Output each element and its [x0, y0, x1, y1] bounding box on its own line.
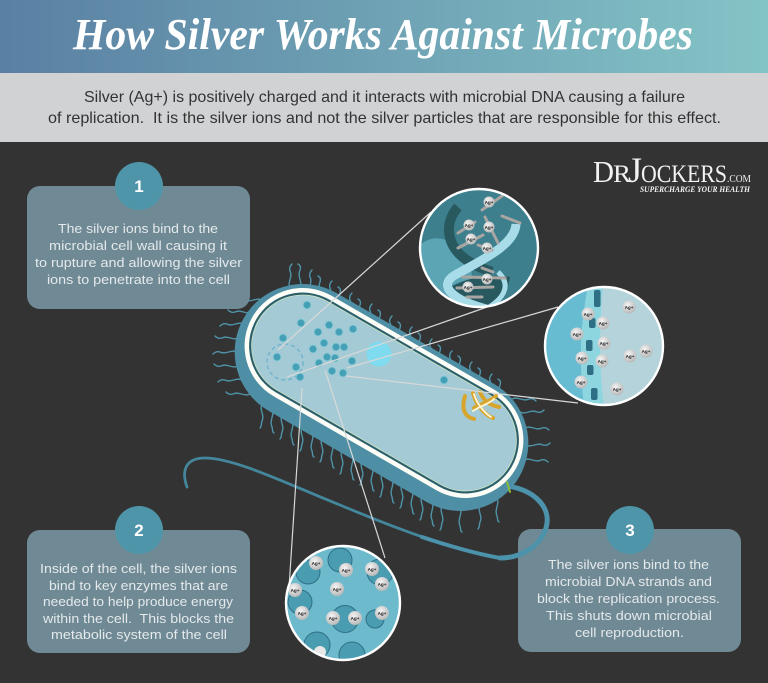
badge 1 [115, 162, 163, 210]
panel: step 1: microbial cell wall causing it [49, 238, 227, 253]
panel: step 3: cell reproduction. [575, 625, 684, 640]
logo: DrJockers.com: SUPERCHARGE YOUR HEALTH [640, 185, 751, 194]
panel: step 3: This shuts down microbial [546, 608, 712, 623]
pointer lines [278, 212, 578, 588]
zoom circle: enzymes: Ag+ [312, 561, 321, 566]
intro text band: of replication. It is the silver ions and not the silver particles that are responsible for this effect. [48, 110, 721, 127]
zoom circle: cell wall rupture: Ag+ [625, 305, 634, 310]
panel: step 3: The silver ions bind to the [548, 557, 709, 572]
header banner [0, 0, 768, 73]
zoom circle: cell wall rupture: Ag+ [598, 359, 607, 364]
zoom circle: enzymes: Ag+ [298, 611, 307, 616]
panel: step 2: bind to key enzymes that are [49, 578, 228, 593]
panel: step 2 [27, 506, 250, 653]
zoom circle: enzymes: Ag+ [329, 616, 338, 621]
logo: DrJockers.com: R [613, 161, 631, 188]
zoom circle: DNA strand: Ag+ [485, 200, 494, 205]
zoom circle: enzymes: Ag+ [378, 611, 387, 616]
zoom circle: DNA strand: Ag+ [467, 237, 476, 242]
panel: step 1: to rupture and allowing the silver [35, 255, 243, 270]
panel: step 3: microbial DNA strands and [545, 574, 712, 589]
white cell wall [223, 267, 545, 519]
zoom circle: DNA strand: Ag+ [483, 277, 492, 282]
logo: DrJockers.com [593, 150, 752, 194]
zoom circle: cell wall rupture: Ag+ [600, 341, 609, 346]
badge 1: 1 [134, 177, 144, 196]
zoom circle: DNA strand: Ag+ [465, 223, 474, 228]
badge 2 [115, 506, 163, 554]
panel: step 1: The silver ions bind to the [58, 221, 218, 236]
zoom circle: cell wall rupture: Ag+ [626, 354, 635, 359]
zoom circle: cell wall rupture: Ag+ [584, 312, 593, 317]
zoom circle: DNA strand: Ag+ [464, 285, 473, 290]
outer cell membrane [210, 259, 553, 536]
cytoplasm [233, 276, 535, 510]
zoom circle: cell wall rupture: Ag+ [613, 387, 622, 392]
badge 3 [606, 506, 654, 554]
badge 2: 2 [134, 521, 144, 540]
dark inner ring [230, 273, 538, 513]
plasmid dashed ring [267, 344, 303, 380]
intro text band: Silver (Ag+) is positively charged and it interacts with microbial DNA causing a failure [84, 89, 685, 106]
zoom circle: enzymes: Ag+ [368, 567, 377, 572]
zoom circle: enzymes: Ag+ [351, 616, 360, 621]
zoom circle: cell wall rupture: Ag+ [642, 349, 651, 354]
panel: step 2: within the cell. This blocks the [42, 611, 234, 626]
intro text band [0, 73, 768, 142]
badge 3: 3 [625, 521, 635, 540]
zoom circle: enzymes: Ag+ [342, 568, 351, 573]
logo: DrJockers.com: J [628, 150, 642, 190]
zoom circle: enzymes: Ag+ [291, 588, 300, 593]
panel: step 2: needed to help produce energy [43, 594, 234, 609]
zoom circle: cell wall rupture: Ag+ [599, 321, 608, 326]
zoom circle: enzymes [285, 545, 401, 668]
zoom circle: enzymes: Ag+ [333, 587, 342, 592]
panel: step 3: block the replication process. [537, 591, 720, 606]
flagellum tail thin part [185, 458, 500, 558]
golgi organelle [463, 392, 499, 419]
panel: step 1: ions to penetrate into the cell [47, 272, 230, 287]
logo: DrJockers.com: .COM [727, 174, 752, 185]
title: How Silver Works Against Microbes [72, 10, 693, 59]
silver ions inside cell [273, 301, 448, 384]
nucleoid bubble [366, 342, 392, 366]
zoom circle: DNA strand: Ag+ [485, 225, 494, 230]
zoom circle: DNA strand [415, 185, 540, 312]
surface hairs [213, 264, 550, 532]
logo: DrJockers.com: D [593, 154, 614, 189]
zoom circle: cell wall rupture: Ag+ [573, 332, 582, 337]
panel: step 1 [27, 162, 250, 309]
flagellum tail thick part [422, 482, 547, 558]
bacterium cell [210, 259, 553, 536]
logo: DrJockers.com: OCKERS [641, 161, 727, 188]
zoom circle: cell wall rupture: Ag+ [578, 356, 587, 361]
zoom circle: cell wall rupture: Ag+ [577, 380, 586, 385]
panel: step 2: metabolic system of the cell [51, 627, 227, 642]
zoom circle: cell wall rupture [544, 286, 664, 406]
panel: step 2: Inside of the cell, the silver ions [40, 561, 238, 576]
panel: step 3 [518, 506, 741, 652]
zoom circle: DNA strand: Ag+ [483, 246, 492, 251]
zoom circle: enzymes: Ag+ [378, 582, 387, 587]
